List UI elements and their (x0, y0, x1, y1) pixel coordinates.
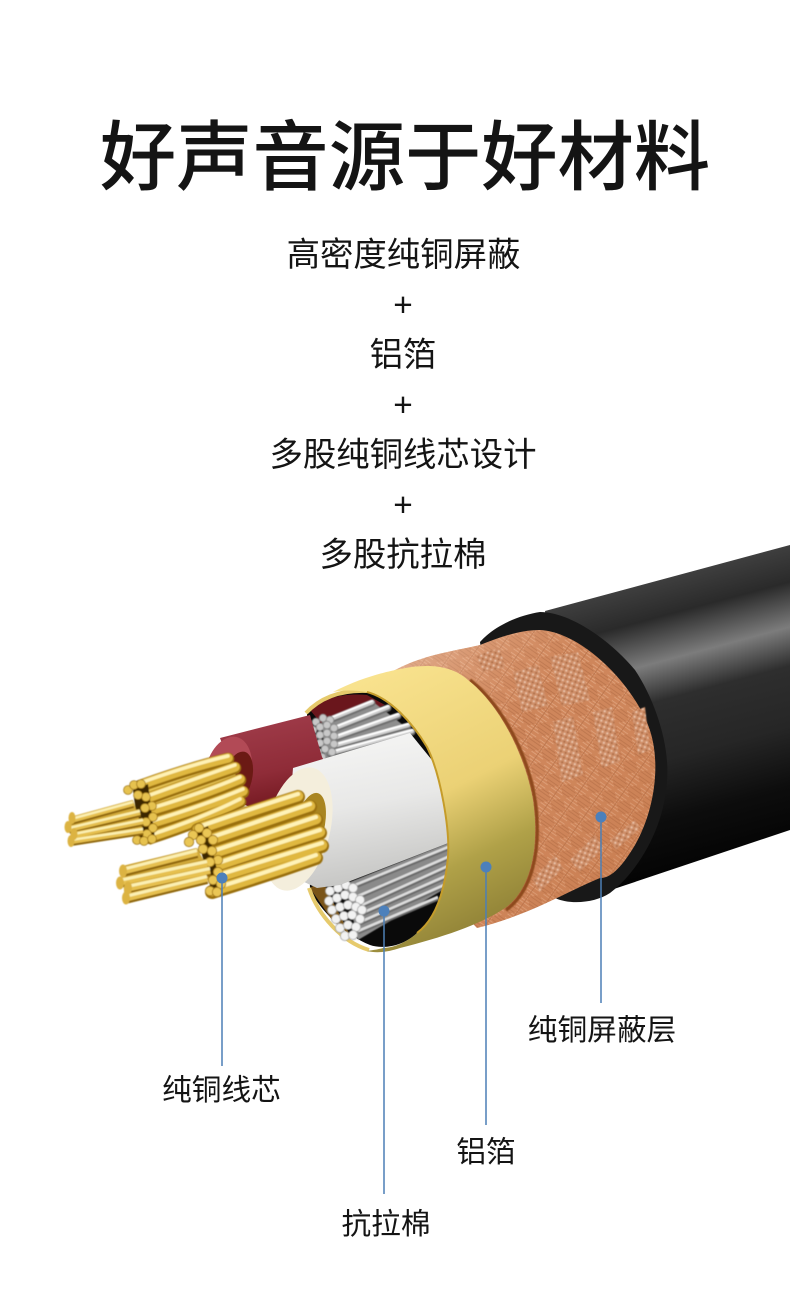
text block: materials list: 多股纯铜线芯设计 (269, 437, 537, 474)
text block: materials list: + (393, 387, 413, 424)
silver tensile fibre: upper (309, 701, 412, 761)
title: 好声音源于好材料 (100, 116, 710, 201)
foil rear rim (306, 691, 369, 950)
callout: copper core: 纯铜线芯 (162, 1074, 281, 1107)
callout: aluminium foil: 铝箔 (456, 1136, 516, 1169)
gold copper core: front bundle (116, 790, 324, 904)
callout: copper shield (528, 812, 676, 1047)
callout: copper shield: 纯铜屏蔽层 (528, 1014, 676, 1047)
cable interior cavity (307, 692, 448, 947)
callout: aluminium foil (456, 862, 516, 1169)
black outer jacket (480, 545, 790, 902)
text block: materials list: 高密度纯铜屏蔽 (287, 237, 520, 274)
cable illustration (64, 545, 790, 952)
text block: materials list (269, 237, 537, 574)
silver tensile fibre: lower (324, 842, 450, 941)
text block: materials list: + (393, 287, 413, 324)
white insulated core (252, 733, 456, 898)
aluminium foil band (333, 666, 535, 952)
copper braided shield (390, 630, 655, 928)
gold copper core: rear bundle (64, 754, 245, 847)
callout: copper core (162, 872, 281, 1107)
text block: materials list: 多股抗拉棉 (320, 537, 486, 574)
text block: materials list: + (393, 487, 413, 524)
callout: tensile fibre (341, 906, 431, 1241)
text block: materials list: 铝箔 (370, 337, 436, 374)
callout: tensile fibre: 抗拉棉 (341, 1208, 431, 1241)
red insulated core (197, 715, 340, 815)
